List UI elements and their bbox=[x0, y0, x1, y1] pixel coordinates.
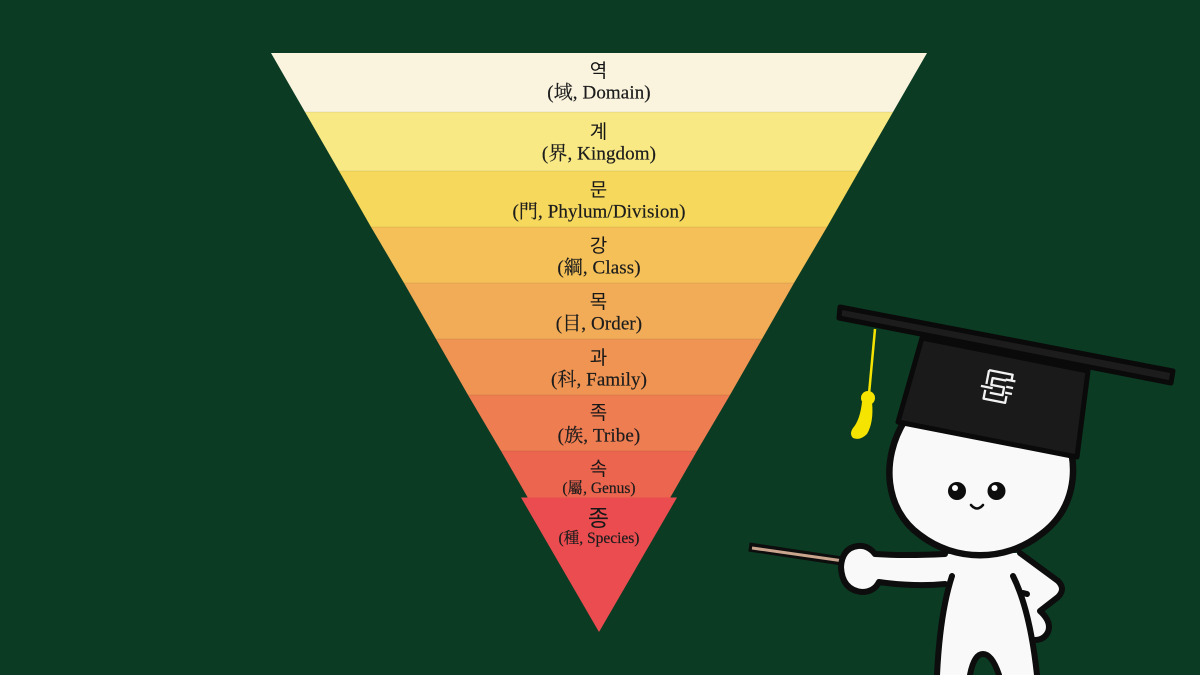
band: Tribe: (族, Tribe) bbox=[558, 424, 640, 446]
graduation cap bbox=[839, 307, 1173, 457]
band: Kingdom: 계 bbox=[590, 121, 607, 143]
band: Phylum/Division: 문 bbox=[590, 180, 607, 201]
band: Species: (種, Species) bbox=[559, 529, 639, 547]
band: Domain: 역 bbox=[590, 60, 607, 82]
band: Domain bbox=[271, 53, 927, 112]
cap brim bbox=[839, 307, 1173, 383]
band: Genus: 속 bbox=[590, 458, 607, 480]
band: Class: (綱, Class) bbox=[557, 256, 641, 278]
band: Phylum/Division: (門, Phylum/Division) bbox=[512, 200, 686, 222]
band: Family: (科, Family) bbox=[551, 368, 647, 390]
band: Order: (目, Order) bbox=[556, 314, 642, 334]
head bbox=[889, 420, 1073, 555]
logo icon bbox=[979, 369, 1017, 404]
band: Genus: (屬, Genus) bbox=[562, 479, 636, 497]
band: Phylum/Division bbox=[339, 171, 859, 227]
band: Class bbox=[371, 227, 827, 283]
band: Order bbox=[404, 283, 794, 339]
tassel bbox=[851, 329, 875, 439]
band: Domain: (域, Domain) bbox=[547, 82, 651, 104]
smile bbox=[971, 505, 983, 508]
pointer stick bbox=[749, 547, 842, 561]
body and arms fill bbox=[841, 546, 1062, 675]
band: Tribe: 족 bbox=[590, 403, 607, 424]
pointing hand and arm outline bbox=[841, 546, 945, 592]
band: Species: 종 bbox=[588, 505, 609, 531]
band: Kingdom: (界, Kingdom) bbox=[542, 142, 656, 164]
band separators bbox=[305, 112, 893, 451]
band: Family bbox=[436, 339, 762, 395]
character: mascot with graduation cap bbox=[749, 307, 1173, 675]
body outlines bbox=[841, 546, 1062, 675]
band: Order: 목 bbox=[590, 292, 607, 313]
eyes bbox=[948, 482, 1006, 500]
band: Species bbox=[521, 498, 677, 632]
pyramid chart bbox=[271, 53, 927, 632]
cap body bbox=[898, 338, 1088, 457]
band: Genus bbox=[501, 451, 697, 498]
band: Tribe bbox=[468, 395, 730, 451]
band: Class: 강 bbox=[590, 235, 607, 257]
band: Kingdom bbox=[305, 112, 893, 171]
band: Family: 과 bbox=[590, 347, 607, 369]
